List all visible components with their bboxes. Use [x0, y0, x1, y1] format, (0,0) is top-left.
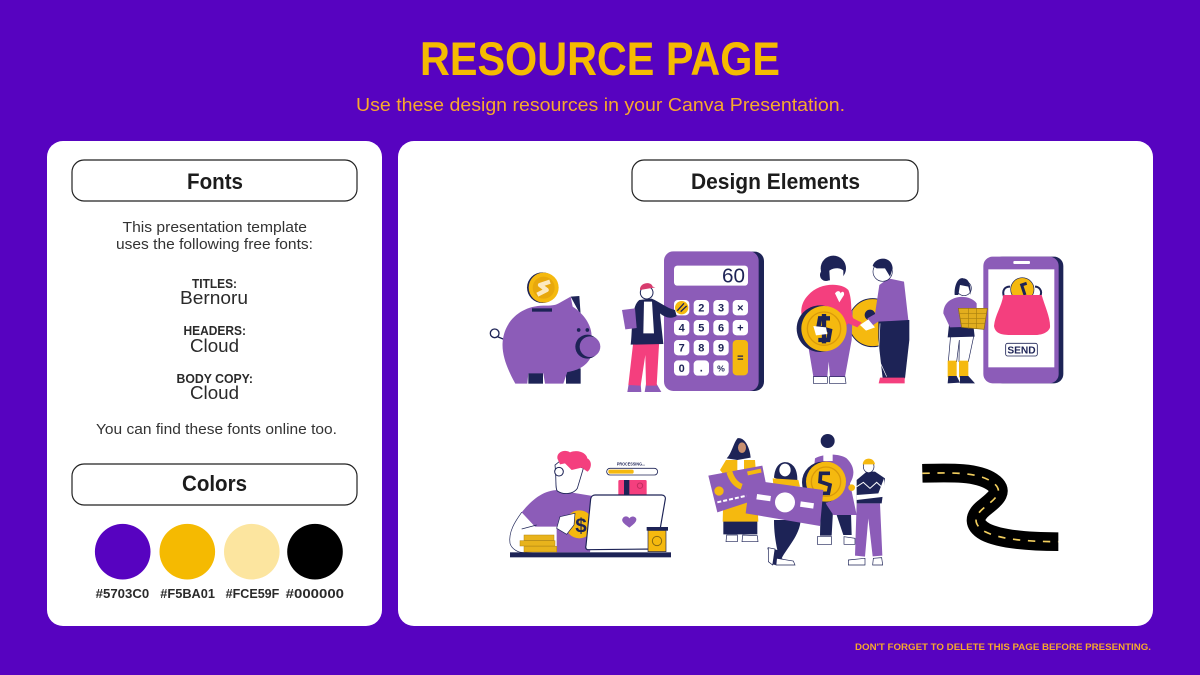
swatch: cream: #FCE59F — [226, 587, 280, 601]
icon: woman with phone sending money — [943, 257, 1063, 383]
heading: design elements — [632, 160, 918, 201]
heading: fonts: Fonts — [187, 169, 243, 194]
swatch: purple: #5703C0 — [96, 587, 149, 601]
swatch: purple — [95, 524, 150, 601]
icon: person with calculator: 6 — [718, 323, 724, 335]
icon: group holding bank card and banknote — [708, 434, 885, 565]
panel: design elements — [398, 141, 1153, 626]
text: titles font: Bernoru — [180, 288, 248, 308]
icon: person with calculator: × — [737, 302, 744, 314]
text: font intro: This presentation template — [122, 220, 307, 236]
text: titles font — [180, 277, 248, 308]
title: RESOURCE PAGE — [420, 32, 780, 85]
heading: colors: Colors — [182, 471, 247, 496]
icon: couple shaking hands with coins — [797, 256, 909, 383]
icon: person with calculator: 9 — [718, 343, 724, 355]
subtitle: Use these design resources in your Canva Presentation. — [356, 95, 845, 115]
icon: person with calculator: = — [737, 352, 744, 364]
icon: person with calculator: 7 — [679, 343, 685, 355]
icon: man with laptop and coins — [510, 451, 671, 557]
text: font intro: uses the following free fonts: — [116, 237, 313, 253]
swatch: black: #000000 — [286, 587, 344, 601]
text: body copy font — [176, 372, 253, 403]
footer note: DON'T FORGET TO DELETE THIS PAGE BEFORE PRESENTING. — [855, 642, 1151, 652]
icon: person with calculator: + — [737, 322, 744, 334]
icon: man with laptop and coins: PROCESSING... — [617, 461, 645, 466]
text: headers font: Cloud — [190, 335, 239, 356]
heading: fonts — [72, 160, 357, 201]
icon: person with calculator: 4 — [679, 323, 686, 335]
icon: woman with phone sending money: SEND — [1007, 346, 1036, 357]
icon: piggy bank with coin — [490, 272, 600, 384]
swatch: amber — [160, 524, 215, 601]
icon: person with calculator: . — [700, 362, 703, 374]
icon: winding road — [922, 473, 1058, 542]
text: font intro — [116, 220, 313, 253]
icon: person with calculator: 3 — [718, 303, 724, 315]
text: body copy font: Cloud — [190, 382, 239, 403]
text: headers font: HEADERS: — [184, 324, 246, 338]
heading: design elements: Design Elements — [691, 169, 860, 194]
icon: person with calculator: 60 — [722, 264, 745, 287]
swatch: black — [286, 524, 344, 601]
panel: fonts and colors — [47, 141, 382, 626]
swatch: amber: #F5BA01 — [160, 587, 215, 601]
text: headers font — [184, 324, 246, 356]
icon: person with calculator: 8 — [698, 343, 704, 355]
icon: person with calculator: 2 — [698, 303, 704, 315]
heading: colors — [72, 464, 357, 505]
icon: person with calculator: 0 — [679, 363, 685, 375]
text: body copy font: BODY COPY: — [176, 372, 253, 386]
icon: person with calculator: % — [717, 363, 725, 373]
text: fonts note: You can find these fonts online too. — [96, 422, 337, 438]
icon: person with calculator — [622, 251, 764, 392]
icon: man with laptop and coins: $ — [575, 514, 587, 537]
text: titles font: TITLES: — [192, 277, 237, 291]
icon: person with calculator: 5 — [698, 323, 704, 335]
swatch: cream — [224, 524, 280, 601]
